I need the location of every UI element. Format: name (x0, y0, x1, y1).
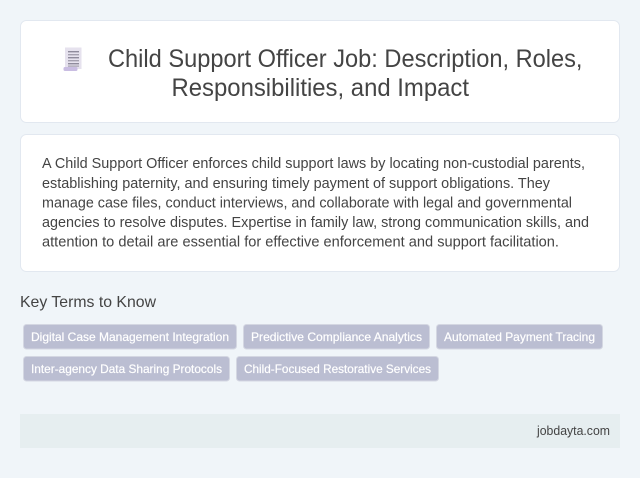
heading: key terms: Key Terms to Know (20, 294, 156, 311)
description text: attention to detail are essential for effective enforcement and support facilitation. (42, 234, 559, 250)
title: Child Support Officer Job: Description, Roles, (108, 45, 582, 73)
tag: child-focused: Child-Focused Restorative Services (244, 362, 431, 376)
tag: predictive compliance (244, 324, 430, 349)
tag: digital case management (24, 324, 236, 349)
panel: description (20, 134, 620, 272)
icon: document scroll (64, 48, 82, 71)
description text: manage case files, conduct interviews, and collaborate with legal and governmental (42, 196, 572, 212)
title: Responsibilities, and Impact (172, 74, 469, 102)
tag: inter-agency (24, 356, 230, 381)
footer (20, 414, 620, 448)
tag: digital case management: Digital Case Management Integration (31, 330, 229, 344)
tag: automated payment: Automated Payment Tracing (444, 330, 595, 344)
tag: child-focused (236, 356, 438, 381)
tag: automated payment (436, 324, 602, 349)
footer: jobdayta.com (536, 424, 610, 438)
panel: title card (20, 20, 620, 122)
description text: agencies to resolve disputes. Expertise in family law, strong communication skills, and (42, 215, 589, 231)
tag: predictive compliance: Predictive Compliance Analytics (251, 330, 422, 344)
title (108, 45, 582, 102)
description text: establishing paternity, and ensuring timely payment of support obligations. They (42, 176, 551, 192)
description text (42, 156, 589, 250)
tag: inter-agency: Inter-agency Data Sharing Protocols (31, 362, 222, 376)
description text: A Child Support Officer enforces child support laws by locating non-custodial parents, (42, 156, 585, 172)
